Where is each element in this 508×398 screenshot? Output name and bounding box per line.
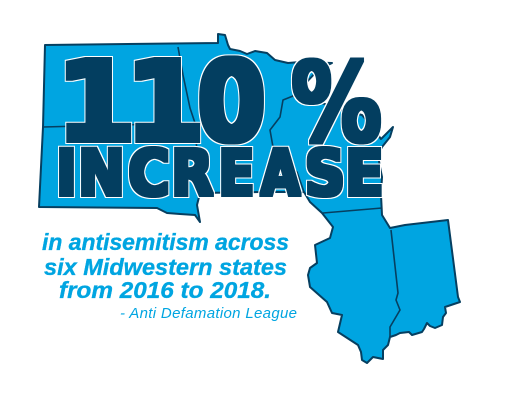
headline: INCREASE: R	[171, 137, 213, 210]
map outline	[39, 34, 460, 363]
map: six Midwestern states	[39, 34, 460, 363]
headline: INCREASE: E	[218, 137, 255, 210]
headline: INCREASE: C	[128, 137, 170, 210]
headline: INCREASE: A	[261, 137, 300, 210]
headline: INCREASE: N	[78, 137, 125, 210]
caption	[42, 229, 289, 303]
state border lines	[43, 47, 400, 337]
headline: INCREASE: I	[56, 137, 77, 210]
caption line 2: six Midwestern states	[44, 254, 287, 280]
attribution: - Anti Defamation League	[120, 305, 297, 322]
headline: INCREASE	[56, 137, 384, 210]
headline: INCREASE: S	[305, 137, 345, 210]
headline: 110%	[56, 38, 382, 167]
caption line 3: from 2016 to 2018.	[59, 277, 271, 303]
digit 1: 1	[56, 38, 136, 166]
percent sign: %	[291, 39, 382, 167]
caption line 1: in antisemitism across	[42, 229, 289, 255]
digit 1: 1	[125, 38, 205, 166]
headline: INCREASE: E	[345, 137, 384, 210]
digit 0: 0	[198, 38, 266, 166]
